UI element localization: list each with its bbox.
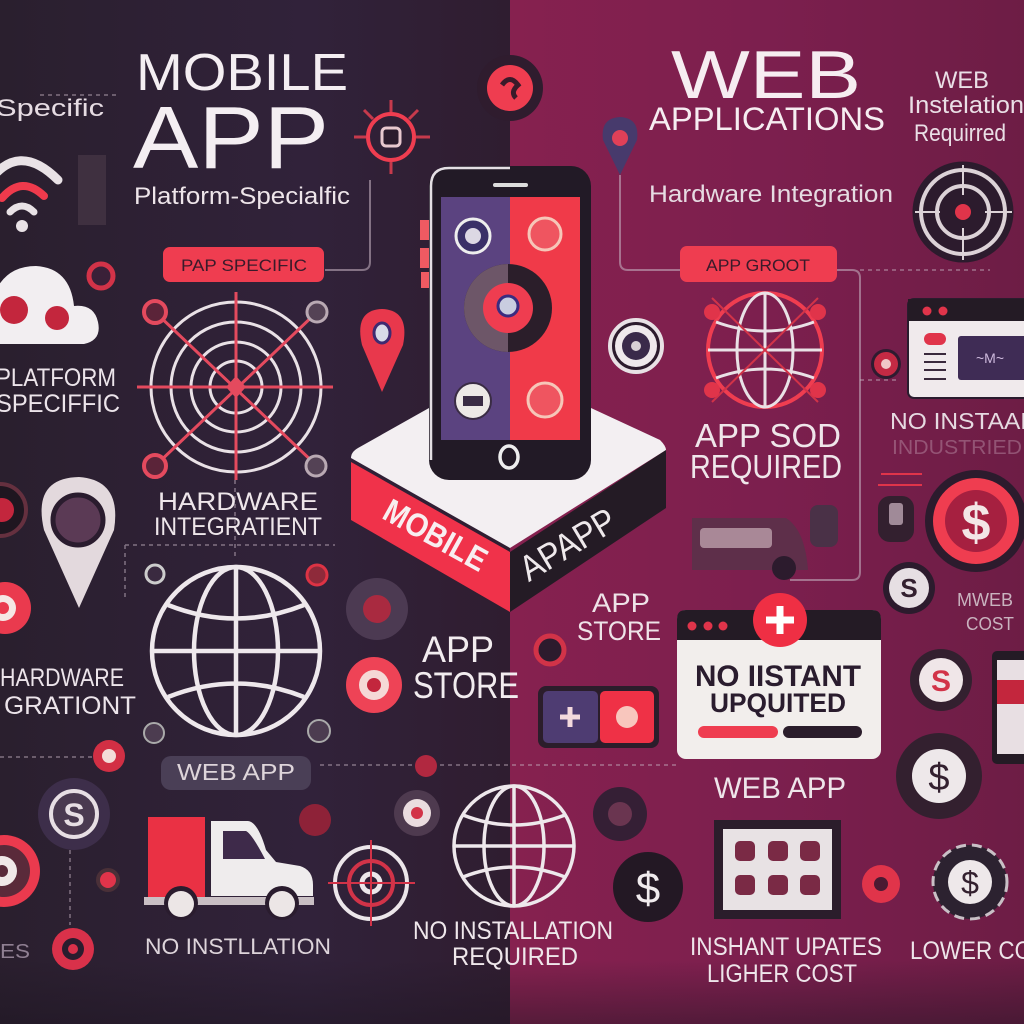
icon: left dark circle [0, 484, 26, 536]
icon: blue map pin [603, 117, 637, 175]
pill: pap specific [163, 247, 324, 282]
icon: dark node [593, 787, 647, 841]
icon: dollar ring: $ [928, 757, 950, 799]
label: app store right: STORE [577, 616, 661, 646]
phone [420, 166, 591, 480]
label: mweb: COST [966, 614, 1014, 634]
label: app store right: APP [592, 588, 650, 618]
icon: target right [913, 162, 1013, 262]
pill: web app [161, 756, 311, 790]
label: hardware integration: HARDWARE [158, 488, 318, 516]
icon: wifi [0, 155, 106, 232]
icon: target bottom [328, 840, 415, 926]
label: instant updates lighter cost: INSHANT UPATES [690, 933, 882, 961]
label: mweb: MWEB [957, 590, 1013, 610]
label: app store right [577, 588, 661, 646]
icon: dollar small [883, 562, 935, 614]
decorative red bars [878, 474, 922, 485]
title: web applications [649, 37, 885, 137]
small nodes around globe [144, 565, 330, 743]
phone screen right [510, 197, 580, 440]
icon: large globe left [152, 567, 320, 735]
icon: red ring node [346, 657, 402, 713]
icon: dollar dark circle left: S [63, 797, 85, 833]
label: web installation required: Requirred [914, 120, 1006, 147]
icon: left red circle [0, 582, 31, 634]
pill: app groot [680, 246, 837, 282]
icon: truck [144, 817, 314, 920]
background: dark left side [0, 0, 510, 1024]
icon: dollar small: S [900, 573, 918, 603]
label: mweb [957, 590, 1014, 634]
label: no installation left: NO INSTLLATION [145, 934, 331, 959]
label: instant updates lighter cost: LIGHER COST [707, 960, 857, 988]
label: hardware integration: INTEGRATIENT [154, 513, 322, 541]
icon: target node center right [610, 320, 662, 372]
icon: small center node [536, 636, 564, 664]
label: hardware left [0, 664, 136, 720]
label: small bottom left text: ES [0, 941, 30, 963]
label: hardware integration [154, 488, 322, 541]
icon: small node near browser [871, 349, 901, 379]
pill: pap specific: PAP SPECIFIC [181, 256, 307, 275]
label: platform specific left [0, 364, 120, 418]
icon: dollar circle small: S [931, 665, 951, 698]
pill: app groot: APP GROOT [706, 256, 810, 275]
label: web installation required: WEB [935, 67, 989, 94]
label: app sod required: REQUIRED [690, 448, 842, 485]
icon: bottom center globe [454, 786, 574, 906]
pedestal label mobile: MOBILE [377, 492, 494, 579]
icon: browser window top right [908, 299, 1024, 398]
icon: dollar poker chip: $ [961, 865, 979, 901]
icon: small red node center [415, 755, 437, 777]
pedestal label apapp: APAPP [512, 501, 624, 589]
icon: dark circle node [346, 578, 408, 640]
icon: red node [862, 865, 900, 903]
icon: dollar ring [896, 733, 982, 819]
icon: dollar dark circle left [38, 778, 110, 850]
label: hardware integration right: Hardware Integration [649, 181, 893, 208]
phone screen left [441, 197, 510, 440]
label: platform-specific: Platform-Specialfic [134, 183, 350, 210]
icon: dollar dark circle center [613, 852, 683, 922]
icon: small capsule [878, 496, 914, 542]
icon: browser popup [677, 593, 881, 759]
icon: van [692, 505, 838, 580]
label: web app: WEB APP [714, 772, 846, 805]
icon: dollar poker chip [933, 845, 1007, 919]
icon: left map pin [42, 477, 115, 608]
label: web installation required [908, 67, 1024, 147]
label: no installation required [413, 917, 613, 971]
title: web applications: APPLICATIONS [649, 101, 885, 137]
pedestal box [351, 408, 666, 612]
background: magenta right side [510, 0, 1024, 1024]
popup text: NO IISTANT [695, 660, 861, 693]
label: blurred subtext: INDUSTRIED [892, 437, 1022, 459]
pill: web app: WEB APP [177, 759, 295, 785]
icon: truck side blob [299, 804, 331, 836]
icon: browser window top right: ~M~ [976, 350, 1004, 366]
icon: red target bottom left [0, 835, 40, 907]
label: app store left: STORE [413, 665, 519, 706]
title: mobile app [133, 44, 348, 187]
icon: map pin red [360, 309, 404, 392]
phone center dial [464, 264, 552, 352]
icon: node bottom [52, 928, 94, 970]
icon: app grid tablet [714, 820, 841, 919]
icon: radar target [137, 292, 333, 480]
icon: small red ring [89, 264, 113, 288]
icon: dollar dark circle center: $ [636, 864, 660, 913]
label: app store left: APP [422, 629, 494, 670]
icon: phone right edge [992, 651, 1024, 764]
label: instant updates lighter cost [690, 933, 882, 988]
title: web applications: WEB [671, 37, 861, 113]
icon: cloud [0, 266, 99, 344]
icon: top center circle [477, 55, 543, 121]
icon: node center [394, 790, 440, 836]
icon: dollar circle small [910, 649, 972, 711]
label: no installation required: NO INSTALLATION [413, 917, 613, 945]
title: mobile app: APP [133, 88, 329, 187]
label: app sod required: APP SOD [695, 417, 841, 454]
popup subtext: UPQUITED [710, 688, 846, 718]
label: web installation required: Instelation [908, 92, 1024, 119]
label: hardware left: HARDWARE [0, 664, 124, 692]
label: no install: NO INSTAAL [890, 408, 1024, 434]
label: app sod required [690, 417, 842, 485]
label: platform specific left: PLATFORM [0, 364, 116, 392]
icon: app store tiles [538, 686, 659, 748]
label: no installation required: REQUIRED [452, 943, 578, 971]
label: hardware left: GRATIONT [4, 692, 136, 720]
icon: small node [98, 870, 118, 890]
icon: small node left bottom [93, 740, 125, 772]
icon: dollar red large: $ [962, 494, 991, 552]
phone home button [500, 446, 518, 468]
icon: globe with red ring [704, 293, 826, 407]
phone app icons [455, 218, 562, 419]
title: mobile app: MOBILE [136, 44, 348, 102]
icon: gear target top [354, 100, 430, 174]
icon: dollar red large [925, 470, 1024, 572]
label: app store left [413, 629, 519, 706]
